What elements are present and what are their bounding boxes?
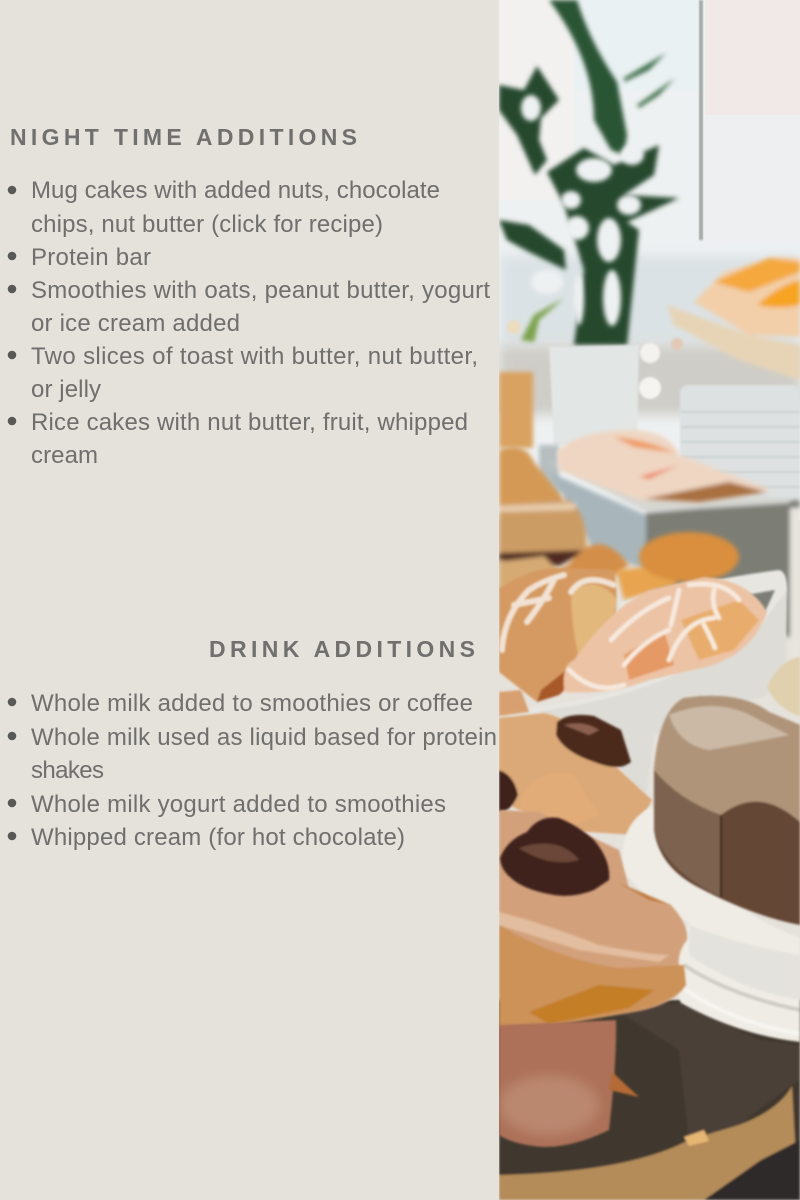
bullet item 4: Two slices of toast with butter, nut butter, <box>31 343 478 370</box>
plant highlights <box>521 95 644 326</box>
bullet item 5: Rice cakes with nut butter, fruit, whipped <box>31 409 468 436</box>
plant leaves <box>499 0 679 345</box>
bullet item 5 <box>8 409 468 469</box>
bullet item 3 <box>8 277 490 337</box>
panel: bakery photo <box>499 0 800 1200</box>
amber flake <box>609 1072 639 1097</box>
iced buns in dish <box>563 577 767 692</box>
bullet item 3: or ice cream added <box>31 310 240 337</box>
bullet item 2: Whole milk used as liquid based for protein <box>31 724 497 751</box>
bullet item 3: Smoothies with oats, peanut butter, yogurt <box>31 277 490 304</box>
left background pastry <box>499 372 533 448</box>
bullet item 2: shakes <box>31 757 104 784</box>
list: night time items <box>8 177 490 469</box>
bullet item 1 <box>8 177 440 238</box>
white cake stand <box>622 806 800 1042</box>
bullet item 1: Whole milk added to smoothies or coffee <box>31 690 473 717</box>
golden buns <box>616 532 739 600</box>
lower left pastry with chocolate <box>499 690 652 835</box>
bullet item 4 <box>8 343 478 403</box>
iced pastries on tray <box>557 430 771 502</box>
icing on left bun <box>502 575 614 650</box>
cronut pastry <box>499 810 687 1028</box>
panel: text background <box>0 0 499 1200</box>
sugar dusting <box>499 1075 599 1135</box>
section: drink additions <box>8 636 497 851</box>
section: night time additions <box>8 124 490 469</box>
white plant pot <box>507 320 683 445</box>
icing on dish buns <box>569 584 739 688</box>
powdered cake <box>654 696 800 925</box>
stacked plates <box>680 385 800 503</box>
bullet item 4: or jelly <box>31 376 101 403</box>
stacked scones <box>499 447 629 590</box>
small pastry behind cake <box>767 657 800 716</box>
heading: drink additions: DRINK ADDITIONS <box>209 636 475 662</box>
iced bun left <box>499 568 617 702</box>
bullet item 5: cream <box>31 442 98 469</box>
wooden board <box>499 1000 800 1200</box>
bullet item 3: Whole milk yogurt added to smoothies <box>31 791 446 818</box>
chocolate swirl <box>500 818 609 896</box>
white serving dish <box>562 568 788 736</box>
orange tart tray <box>667 257 800 380</box>
window background <box>499 0 800 520</box>
bullet item 4: Whipped cream (for hot chocolate) <box>31 824 405 851</box>
list: drink items <box>8 690 497 851</box>
heading: night time additions: NIGHT TIME ADDITIONS <box>10 124 357 150</box>
cronut base <box>499 1020 616 1147</box>
bullet item 1: Mug cakes with added nuts, chocolate <box>31 177 440 204</box>
glass stand <box>539 445 800 658</box>
bullet item 2: Protein bar <box>31 244 151 271</box>
bullet item 1: chips, nut butter (click for recipe) <box>31 211 383 238</box>
bullet item 2 <box>8 724 497 784</box>
